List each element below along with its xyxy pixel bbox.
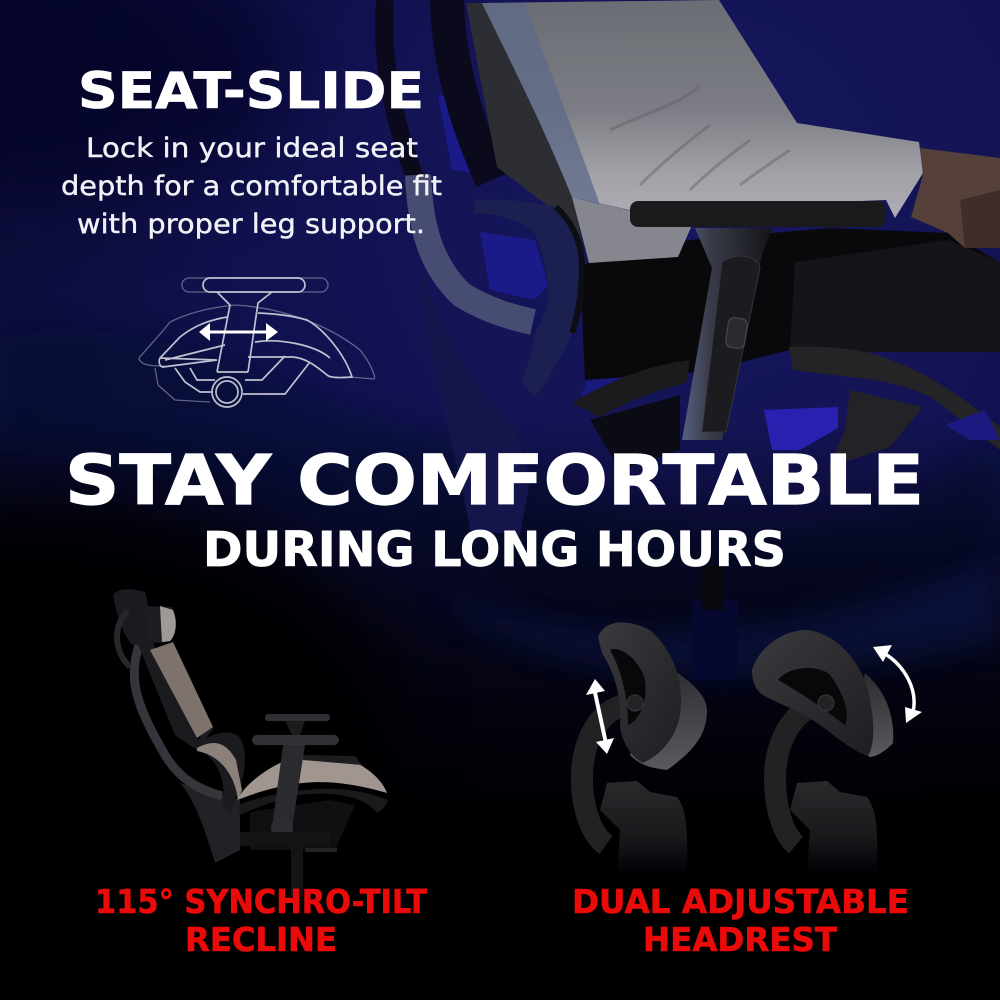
body text: seat-slide description: with proper leg support. [77,209,425,240]
headrest side [630,665,707,770]
headrest support arm [582,703,635,845]
headline: STAY COMFORTABLE: STAY COMFORTABLE [65,441,924,521]
label: synchro-tilt recline: 115° SYNCHRO-TILT [95,882,427,921]
body text: seat-slide description [61,133,442,240]
back mesh [150,642,213,738]
headrest cushion [598,622,681,763]
headrest support arm [775,703,826,845]
sleeve wrinkles [610,85,790,190]
headrest cushion [752,630,873,756]
grey sleeve [482,0,923,218]
subheadline: DURING LONG HOURS: DURING LONG HOURS [203,522,786,578]
label: synchro-tilt recline: RECLINE [185,920,337,959]
blue mesh pockets behind back [438,95,640,410]
stem slot and button [702,256,760,432]
chair lower back column [421,267,530,535]
photo: headrest tilt adjustment [752,630,922,873]
reclined frame [134,645,222,796]
seat mesh [237,757,387,800]
hand [911,148,1000,248]
shirt hem [572,197,692,263]
armrests [252,714,339,839]
headrest side [850,673,893,757]
headrest base cushion [790,781,877,873]
arrow: tilt arc [873,645,922,723]
headrest [113,589,176,667]
photo: reclined chair [113,589,388,896]
label: dual adjustable headrest [572,882,909,959]
upper back frame [384,0,492,190]
body text: seat-slide description: Lock in your ideal seat [86,133,418,164]
pivot [818,695,834,711]
lower back panel [180,783,240,863]
photo: seated person on chair [384,0,1000,680]
arrow: horizontal slide [199,323,278,341]
pivot [627,695,643,711]
body text: seat-slide description: depth for a comfortable fit [61,171,442,202]
label: synchro-tilt recline [95,882,427,959]
chair base column [692,565,738,680]
lumbar [197,732,245,812]
armrest pad [630,201,886,227]
icon: seat slide line drawing [139,278,374,407]
heading: SEAT-SLIDE: SEAT-SLIDE [78,62,424,120]
lumbar support [474,199,582,397]
headrest base cushion [600,781,687,873]
armrest stem [682,228,772,440]
back frame dark [137,640,214,750]
seat pan [572,347,1000,470]
thigh and lower body [580,228,1000,380]
torso dark shirt [466,3,585,262]
label: dual adjustable headrest: HEADREST [643,920,837,959]
frame grey arc [418,175,533,322]
photo: headrest height adjustment [582,622,707,873]
seat underside [238,789,388,815]
label: dual adjustable headrest: DUAL ADJUSTABLE [572,882,909,921]
arrow: up and down [586,679,614,754]
mechanism and post [240,832,337,896]
